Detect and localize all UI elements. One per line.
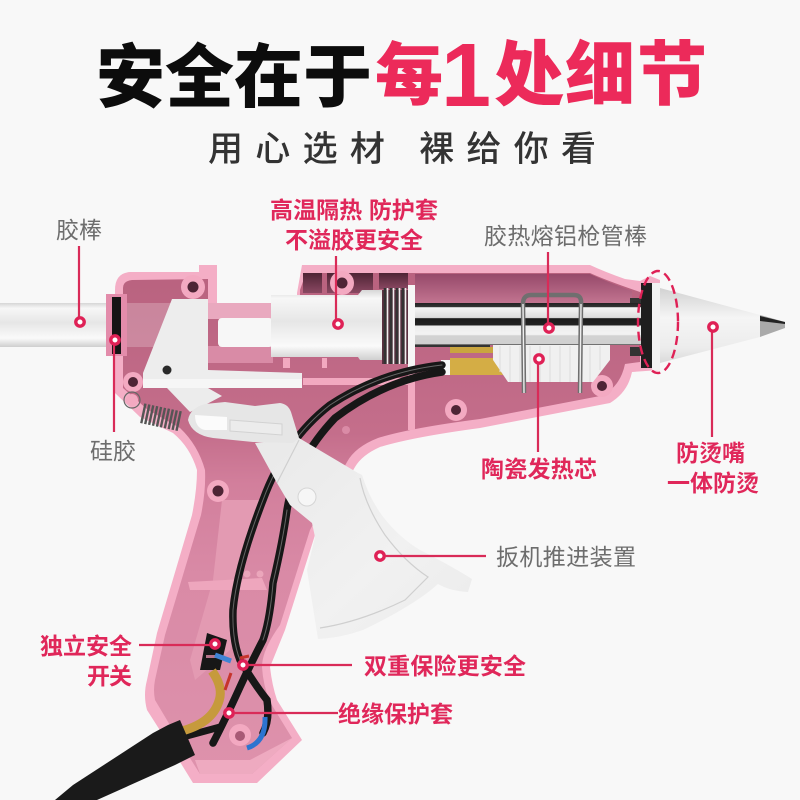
title: 节 [637, 36, 707, 114]
label: insulation sleeve [270, 197, 438, 328]
switch [200, 633, 227, 670]
nozzle cone [660, 288, 760, 363]
label: nozzle [667, 323, 759, 496]
silicone seal [106, 294, 127, 356]
label: glue stick [56, 217, 102, 326]
windows at top of shell [303, 273, 408, 293]
feed clamp [143, 299, 302, 388]
title: 每 [375, 38, 443, 114]
pusher rod [218, 318, 273, 347]
label: insulation sleeve: 高温隔热 防护套 [270, 197, 438, 223]
title: 1 [441, 26, 491, 126]
ribs [283, 358, 415, 430]
label: silicone [90, 336, 136, 464]
label: nozzle: 防烫嘴 [676, 440, 745, 466]
trigger pivot [298, 488, 316, 506]
label: insulation sleeve: 不溢胶更安全 [285, 227, 423, 253]
brass sleeve [182, 671, 220, 731]
label: trigger: 扳机推进装置 [496, 544, 636, 570]
label: safety switch: 独立安全 [40, 633, 132, 659]
label: insulation cover: 绝缘保护套 [338, 701, 453, 727]
label: aluminium barrel: 胶热熔铝枪管棒 [484, 223, 647, 249]
black wires [183, 365, 442, 743]
label: ceramic heater [481, 355, 597, 482]
gun shell inner [123, 273, 640, 774]
translucent rod inside [124, 303, 174, 347]
trigger lips [277, 440, 428, 628]
label: nozzle: 一体防烫 [667, 470, 759, 496]
power cord strain relief [55, 720, 195, 800]
coil spring [382, 288, 408, 364]
upper channel [415, 274, 632, 303]
label: silicone: 硅胶 [90, 438, 136, 464]
title: 处 [494, 36, 564, 114]
brass sleeve inside [441, 347, 503, 375]
label: trigger [376, 544, 636, 570]
glue gun illustration [55, 265, 785, 800]
title: 细 [565, 36, 635, 114]
screw posts [123, 271, 613, 746]
dashed highlight [638, 271, 678, 373]
subtitle: 用心选材 裸给你看 [208, 130, 596, 169]
trigger blade [255, 438, 472, 639]
tension spring [141, 404, 181, 431]
spring loop [124, 392, 140, 408]
label: aluminium barrel [484, 223, 647, 332]
label: safety switch [40, 633, 219, 689]
ceramic heater [493, 344, 610, 382]
title: 安全在于 [96, 39, 372, 116]
label: glue stick: 胶棒 [56, 217, 102, 243]
label: double protection [239, 653, 526, 679]
label: double protection: 双重保险更安全 [364, 653, 526, 679]
wire clips [523, 295, 581, 393]
insulation sleeve [271, 290, 382, 360]
glue stick [0, 303, 108, 347]
label: safety switch: 开关 [87, 663, 132, 689]
label: insulation cover [225, 701, 453, 727]
title [96, 26, 707, 126]
nozzle collar [641, 283, 652, 368]
grip inner panels [188, 426, 350, 774]
blue and red wires [215, 655, 265, 748]
aluminium barrel [415, 303, 641, 345]
trigger link [167, 388, 222, 412]
gun shell outer [115, 265, 660, 783]
label: ceramic heater: 陶瓷发热芯 [481, 456, 597, 482]
trigger arm [188, 402, 299, 443]
